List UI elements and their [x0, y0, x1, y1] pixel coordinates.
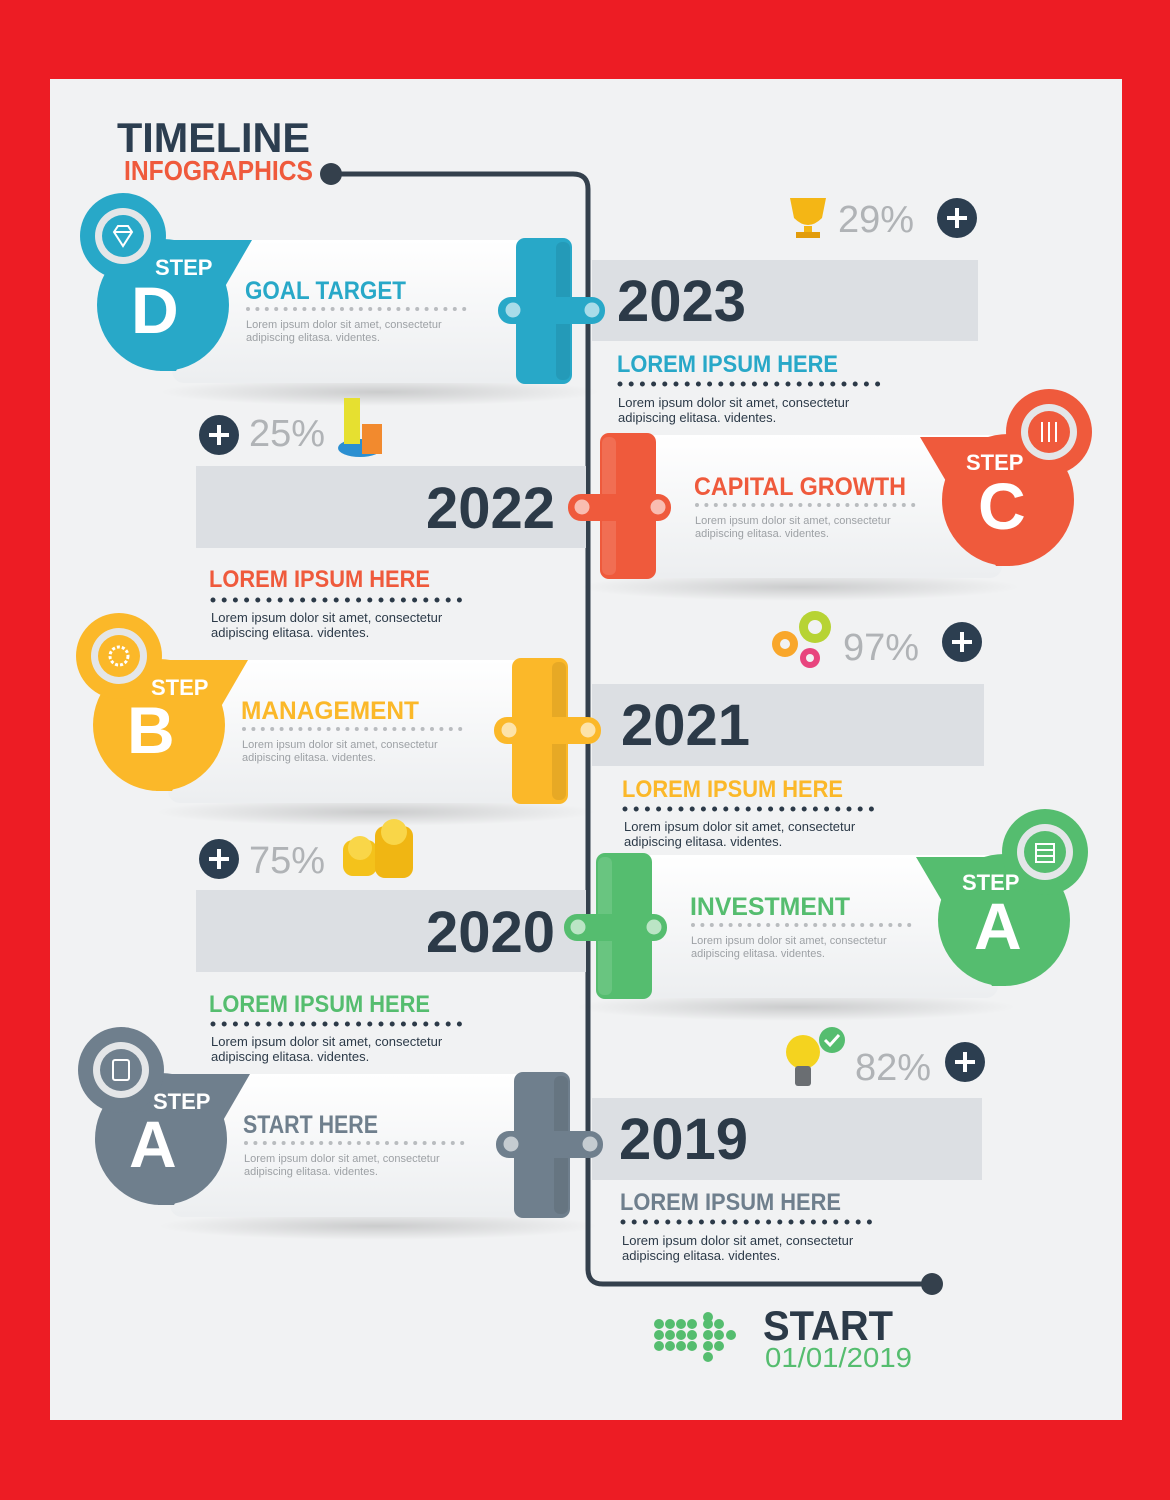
text block 2021: LOREM IPSUM HERE — [622, 776, 843, 803]
year band 2021 — [592, 684, 984, 766]
card: step C capital growth: Lorem ipsum dolor sit amet, consectetur — [695, 515, 891, 527]
card: step A start here: A — [129, 1107, 177, 1181]
card: step A investment: A — [974, 889, 1022, 963]
card: step C capital growth: C — [978, 469, 1026, 543]
timeline line — [320, 163, 943, 1295]
text block 2020: Lorem ipsum dolor sit amet, consectetur — [211, 1034, 443, 1049]
year band 2023: 2023 — [617, 269, 746, 334]
stat 29% with trophy — [790, 198, 977, 241]
year band 2019: 2019 — [619, 1107, 748, 1172]
title: TIMELINE — [117, 114, 310, 161]
card: step B management: B — [127, 693, 175, 767]
year band 2022: 2022 — [426, 476, 555, 541]
start arrow dots — [654, 1312, 736, 1362]
text block 2019: Lorem ipsum dolor sit amet, consectetur — [622, 1233, 854, 1248]
text block 2020: adipiscing elitasa. videntes. — [211, 1049, 369, 1064]
card: step B management: STEP — [151, 675, 208, 700]
text block 2019: LOREM IPSUM HERE — [620, 1189, 841, 1216]
start label: 01/01/2019 — [765, 1342, 912, 1373]
card: step C capital growth: adipiscing elitasa. videntes. — [695, 528, 829, 540]
card: step A start here: adipiscing elitasa. videntes. — [244, 1166, 378, 1178]
card: step B management: Lorem ipsum dolor sit amet, consectetur — [242, 739, 438, 751]
card: step D goal target: D — [131, 273, 179, 347]
year band 2021: 2021 — [621, 693, 750, 758]
text block 2023: LOREM IPSUM HERE — [617, 351, 838, 378]
card: step A start here: Lorem ipsum dolor sit amet, consectetur — [244, 1153, 440, 1165]
icon: clipboard — [113, 1060, 129, 1080]
card: step A investment: INVESTMENT — [690, 893, 850, 921]
card: step A investment: STEP — [962, 870, 1019, 895]
text block 2021: Lorem ipsum dolor sit amet, consectetur — [624, 819, 856, 834]
text block 2022: Lorem ipsum dolor sit amet, consectetur — [211, 610, 443, 625]
start label — [763, 1302, 912, 1373]
text block 2019: adipiscing elitasa. videntes. — [622, 1248, 780, 1263]
text block 2022 — [209, 566, 470, 640]
stat 75% with coins — [199, 819, 413, 882]
card: step A investment — [564, 809, 1088, 1021]
stat 97% with gears — [772, 611, 982, 669]
stat 82% with bulb — [786, 1027, 985, 1089]
text block 2020: LOREM IPSUM HERE — [209, 991, 430, 1018]
icon: sliders — [1042, 422, 1056, 442]
card: step D goal target — [80, 193, 605, 406]
year band 2022 — [196, 466, 586, 548]
year band 2023 — [592, 260, 978, 341]
stat 25% with chart: 25% — [249, 413, 325, 455]
card: step C capital growth: STEP — [966, 450, 1023, 475]
title — [117, 114, 313, 186]
text block 2022: LOREM IPSUM HERE — [209, 566, 430, 593]
card: step D goal target: adipiscing elitasa. videntes. — [246, 332, 380, 344]
card: step C capital growth: CAPITAL GROWTH — [694, 473, 906, 501]
card: step D goal target: STEP — [155, 255, 212, 280]
card: step B management: adipiscing elitasa. videntes. — [242, 752, 376, 764]
stat 75% with coins: 75% — [249, 840, 325, 882]
stat 97% with gears: 97% — [843, 627, 919, 669]
text block 2019 — [620, 1189, 880, 1263]
start label: START — [763, 1302, 893, 1349]
year band 2020: 2020 — [426, 900, 555, 965]
card: step B management: MANAGEMENT — [241, 697, 419, 725]
icon: coin stack — [1036, 844, 1054, 862]
icon: diamond — [114, 226, 132, 246]
card: step A start here: START HERE — [243, 1111, 378, 1139]
card: step C capital growth — [568, 389, 1092, 601]
card: step A start here — [78, 1027, 603, 1240]
card: step A investment: adipiscing elitasa. videntes. — [691, 948, 825, 960]
year band 2020 — [196, 890, 586, 972]
text block 2021: adipiscing elitasa. videntes. — [624, 834, 782, 849]
text block 2023: Lorem ipsum dolor sit amet, consectetur — [618, 395, 850, 410]
text block 2023: adipiscing elitasa. videntes. — [618, 410, 776, 425]
card: step D goal target: Lorem ipsum dolor sit amet, consectetur — [246, 319, 442, 331]
stat 25% with chart — [199, 398, 382, 457]
card: step B management — [76, 613, 601, 826]
text block 2021 — [622, 776, 882, 849]
text block 2020 — [209, 991, 470, 1064]
stat 82% with bulb: 82% — [855, 1047, 931, 1089]
card: step A investment: Lorem ipsum dolor sit amet, consectetur — [691, 935, 887, 947]
text block 2023 — [617, 351, 878, 425]
text block 2022: adipiscing elitasa. videntes. — [211, 625, 369, 640]
year band 2019 — [592, 1098, 982, 1180]
title: INFOGRAPHICS — [124, 155, 313, 186]
card: step D goal target: GOAL TARGET — [245, 277, 406, 305]
stat 29% with trophy: 29% — [838, 199, 914, 241]
card: step A start here: STEP — [153, 1089, 210, 1114]
icon: gear — [110, 647, 128, 665]
